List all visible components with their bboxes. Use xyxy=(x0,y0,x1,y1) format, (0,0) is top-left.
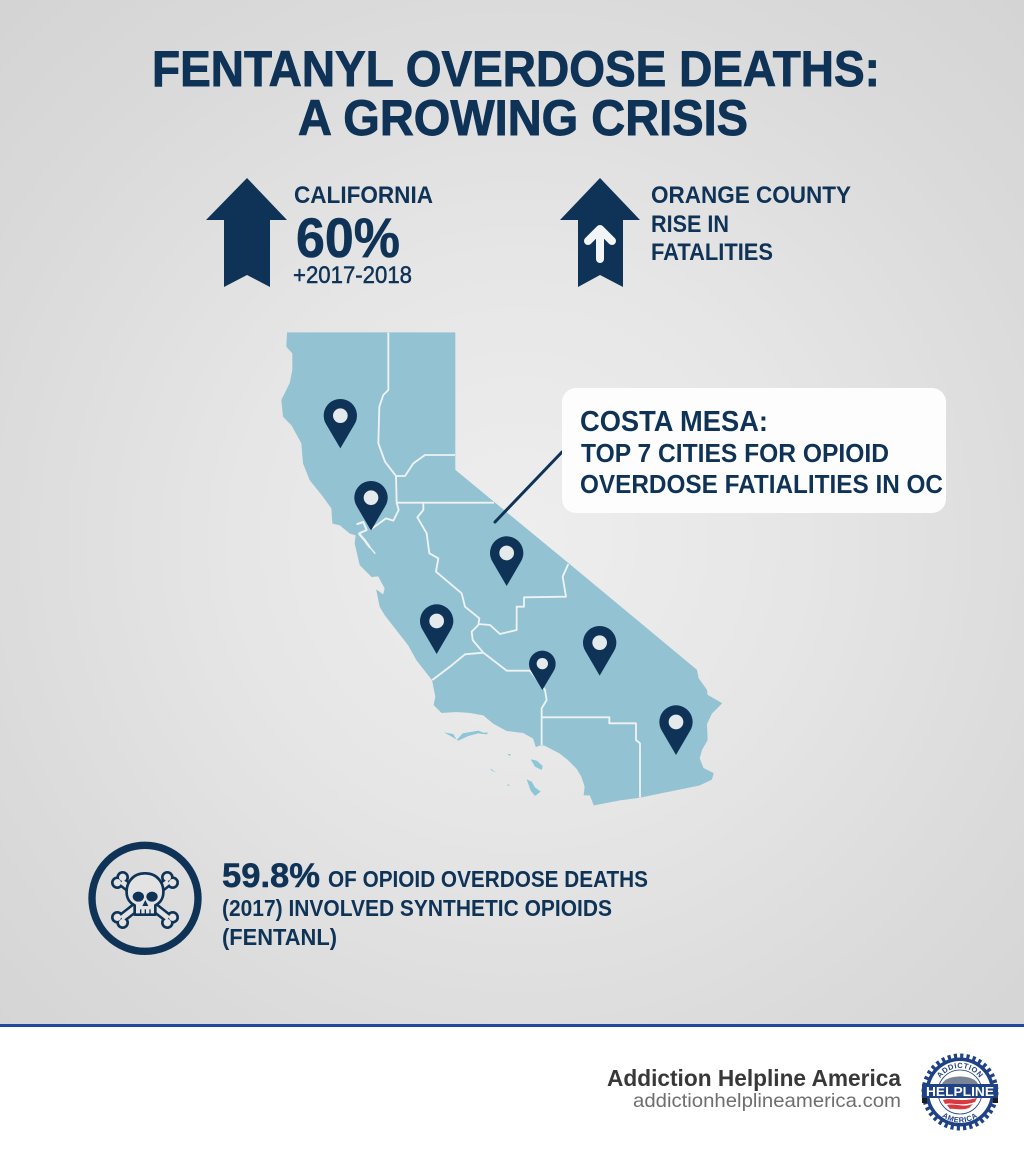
title xyxy=(152,40,880,146)
statistic text: 59.8% xyxy=(222,857,648,950)
callout leader line xyxy=(495,452,562,522)
Orange County text: FATALITIES xyxy=(651,239,773,266)
icon: skull and crossbones xyxy=(92,845,198,951)
statistic text: 59.8%: 59.8% xyxy=(222,857,320,895)
logo badge: HELPLINE xyxy=(926,1085,994,1099)
map pins xyxy=(324,399,693,755)
pin 1 xyxy=(324,399,357,448)
statistic text: 59.8%: OF OPIOID OVERDOSE DEATHS xyxy=(328,866,648,892)
pin 6 xyxy=(583,626,616,676)
county borders xyxy=(370,333,640,797)
map landmass xyxy=(282,333,722,805)
icon: California up arrow xyxy=(206,178,287,287)
skull xyxy=(127,873,163,915)
crossbones xyxy=(111,871,179,929)
footer brand text xyxy=(607,1065,901,1112)
logo badge: AMERICA xyxy=(942,1113,978,1123)
statistic text: 59.8%: (2017) INVOLVED SYNTHETIC OPIOIDS xyxy=(222,895,612,921)
pin 5 xyxy=(529,651,556,690)
pin 3 xyxy=(490,536,523,586)
Orange County text: ORANGE COUNTY xyxy=(651,182,851,209)
callout: Costa Mesa: COSTA MESA: xyxy=(580,406,768,438)
footer brand text: addictionhelplineamerica.com xyxy=(633,1090,901,1112)
callout: Costa Mesa: OVERDOSE FATIALITIES IN OC xyxy=(580,469,943,499)
logo badge xyxy=(922,1054,998,1130)
California map xyxy=(282,333,722,805)
California years: +2017-2018 xyxy=(293,262,412,289)
California percentage: 60% xyxy=(296,206,400,269)
pin 2 xyxy=(354,481,388,531)
stat: Orange County xyxy=(560,178,851,287)
Orange County text: RISE IN xyxy=(651,211,729,238)
California label: CALIFORNIA xyxy=(294,182,433,209)
bay xyxy=(357,522,375,553)
pin 4 xyxy=(420,604,453,654)
statistic text: 59.8%: (FENTANL) xyxy=(222,924,337,950)
title: A GROWING CRISIS xyxy=(298,89,748,146)
icon: Orange County up arrow xyxy=(560,178,640,287)
footer band xyxy=(0,1024,1024,1154)
footer brand text: Addiction Helpline America xyxy=(607,1065,901,1091)
pin 7 xyxy=(659,705,693,755)
Orange County text xyxy=(651,182,851,266)
logo badge: ADDICTION xyxy=(938,1062,984,1078)
callout: Costa Mesa: TOP 7 CITIES FOR OPIOID xyxy=(581,438,889,468)
title: FENTANYL OVERDOSE DEATHS: xyxy=(152,40,880,97)
channel islands xyxy=(444,731,543,796)
callout: Costa Mesa xyxy=(562,388,946,513)
stat: California xyxy=(206,178,433,289)
